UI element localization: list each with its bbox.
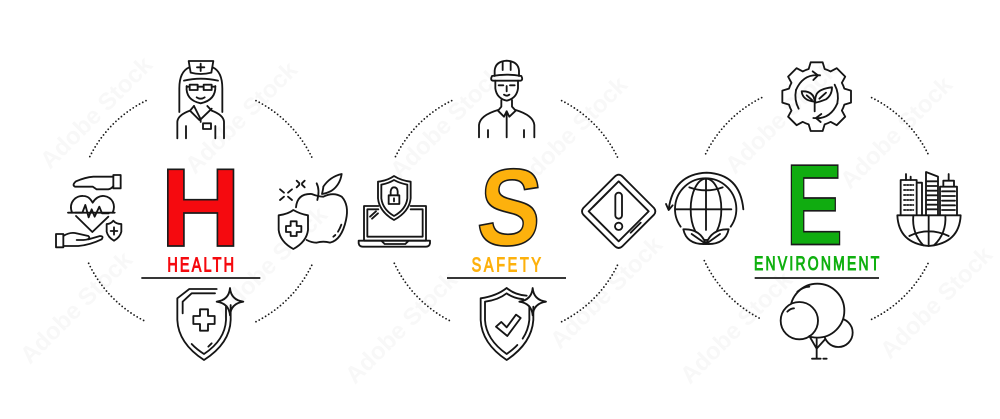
watermark text: Adobe Stock — [545, 231, 668, 354]
watermark text: Adobe Stock — [180, 56, 303, 179]
panel: health — [56, 61, 347, 360]
icon: shield with check — [481, 288, 546, 360]
icon: trees — [781, 284, 853, 359]
icon: laptop with lock shield — [359, 176, 430, 247]
icon: apple and shield — [279, 174, 347, 249]
label: safety: SAFETY — [472, 253, 541, 276]
panel: safety — [359, 61, 655, 360]
underline: health — [141, 275, 260, 280]
icon: shield with cross — [177, 288, 243, 360]
icon: nurse — [177, 61, 224, 138]
watermark text: Adobe Stock — [35, 51, 158, 174]
watermark text: Adobe Stock — [210, 201, 333, 324]
dotted ring: environment — [704, 98, 929, 319]
letter E: E — [786, 142, 843, 270]
watermark text: Adobe Stock — [340, 266, 463, 389]
underline: environment — [755, 275, 879, 280]
letter S: S — [473, 147, 547, 269]
watermark text: Adobe Stock — [720, 56, 843, 179]
watermark text — [15, 51, 998, 389]
watermark text: Adobe Stock — [385, 61, 508, 184]
icon: city on globe — [897, 172, 961, 246]
watermark text: Adobe Stock — [15, 246, 138, 369]
watermark text: Adobe Stock — [835, 71, 958, 194]
letter H: H — [160, 145, 241, 270]
icon: warning diamond — [582, 175, 655, 248]
panel: environment — [666, 62, 961, 359]
watermark text: Adobe Stock — [675, 266, 798, 389]
label: environment: ENVIRONMENT — [754, 253, 879, 275]
dotted ring: safety — [394, 101, 618, 322]
label: health: HEALTH — [167, 253, 234, 276]
icon: hands holding heart — [56, 175, 121, 247]
underline: safety — [447, 275, 566, 280]
icon: gear with leaves — [782, 62, 851, 131]
watermark text: Adobe Stock — [510, 71, 633, 194]
watermark text: Adobe Stock — [875, 241, 998, 364]
icon: globe with leaves — [666, 173, 743, 244]
icon: worker — [479, 61, 534, 137]
dotted ring: health — [89, 101, 313, 322]
